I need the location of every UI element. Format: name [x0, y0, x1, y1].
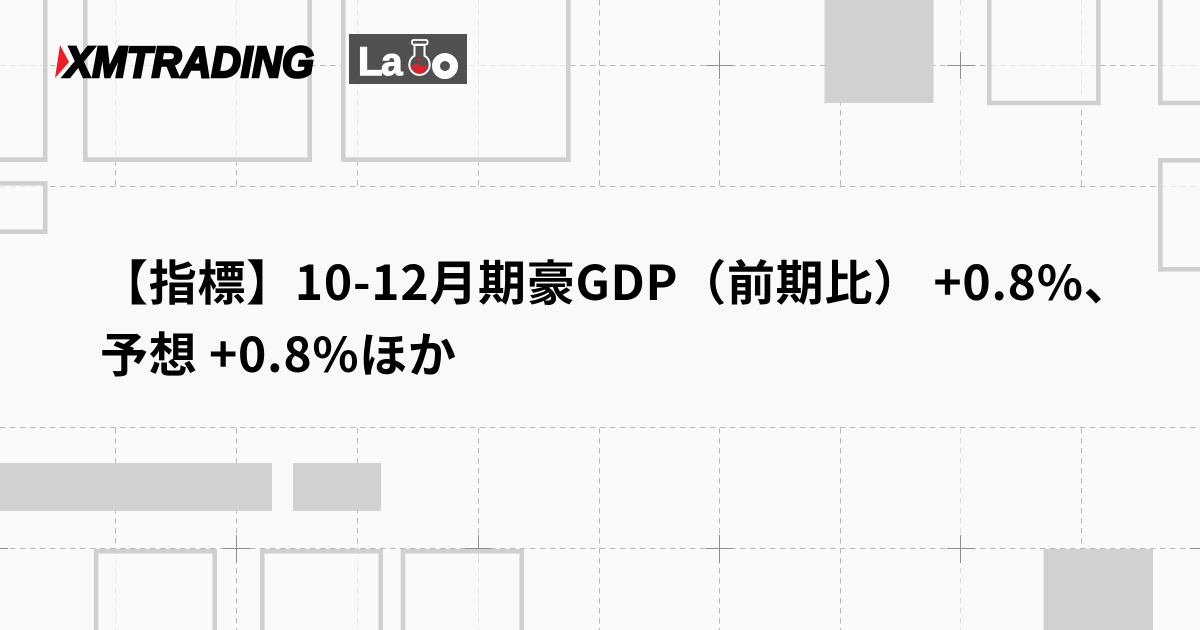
icon: red arrow mark: [55, 45, 69, 78]
logo: Lab: a: [381, 41, 403, 84]
icon: flask: [409, 40, 430, 75]
logo letter o: [436, 57, 454, 75]
title: 【指標】10-12月期豪GDP（前期比） +0.8%、: [100, 244, 1132, 314]
logo: XMTRADING: [55, 38, 314, 84]
logo letters La: L: [358, 40, 382, 84]
title: 予想 +0.8%ほか: [100, 316, 457, 386]
logo: Lab: [349, 34, 467, 84]
title: [100, 244, 1132, 386]
